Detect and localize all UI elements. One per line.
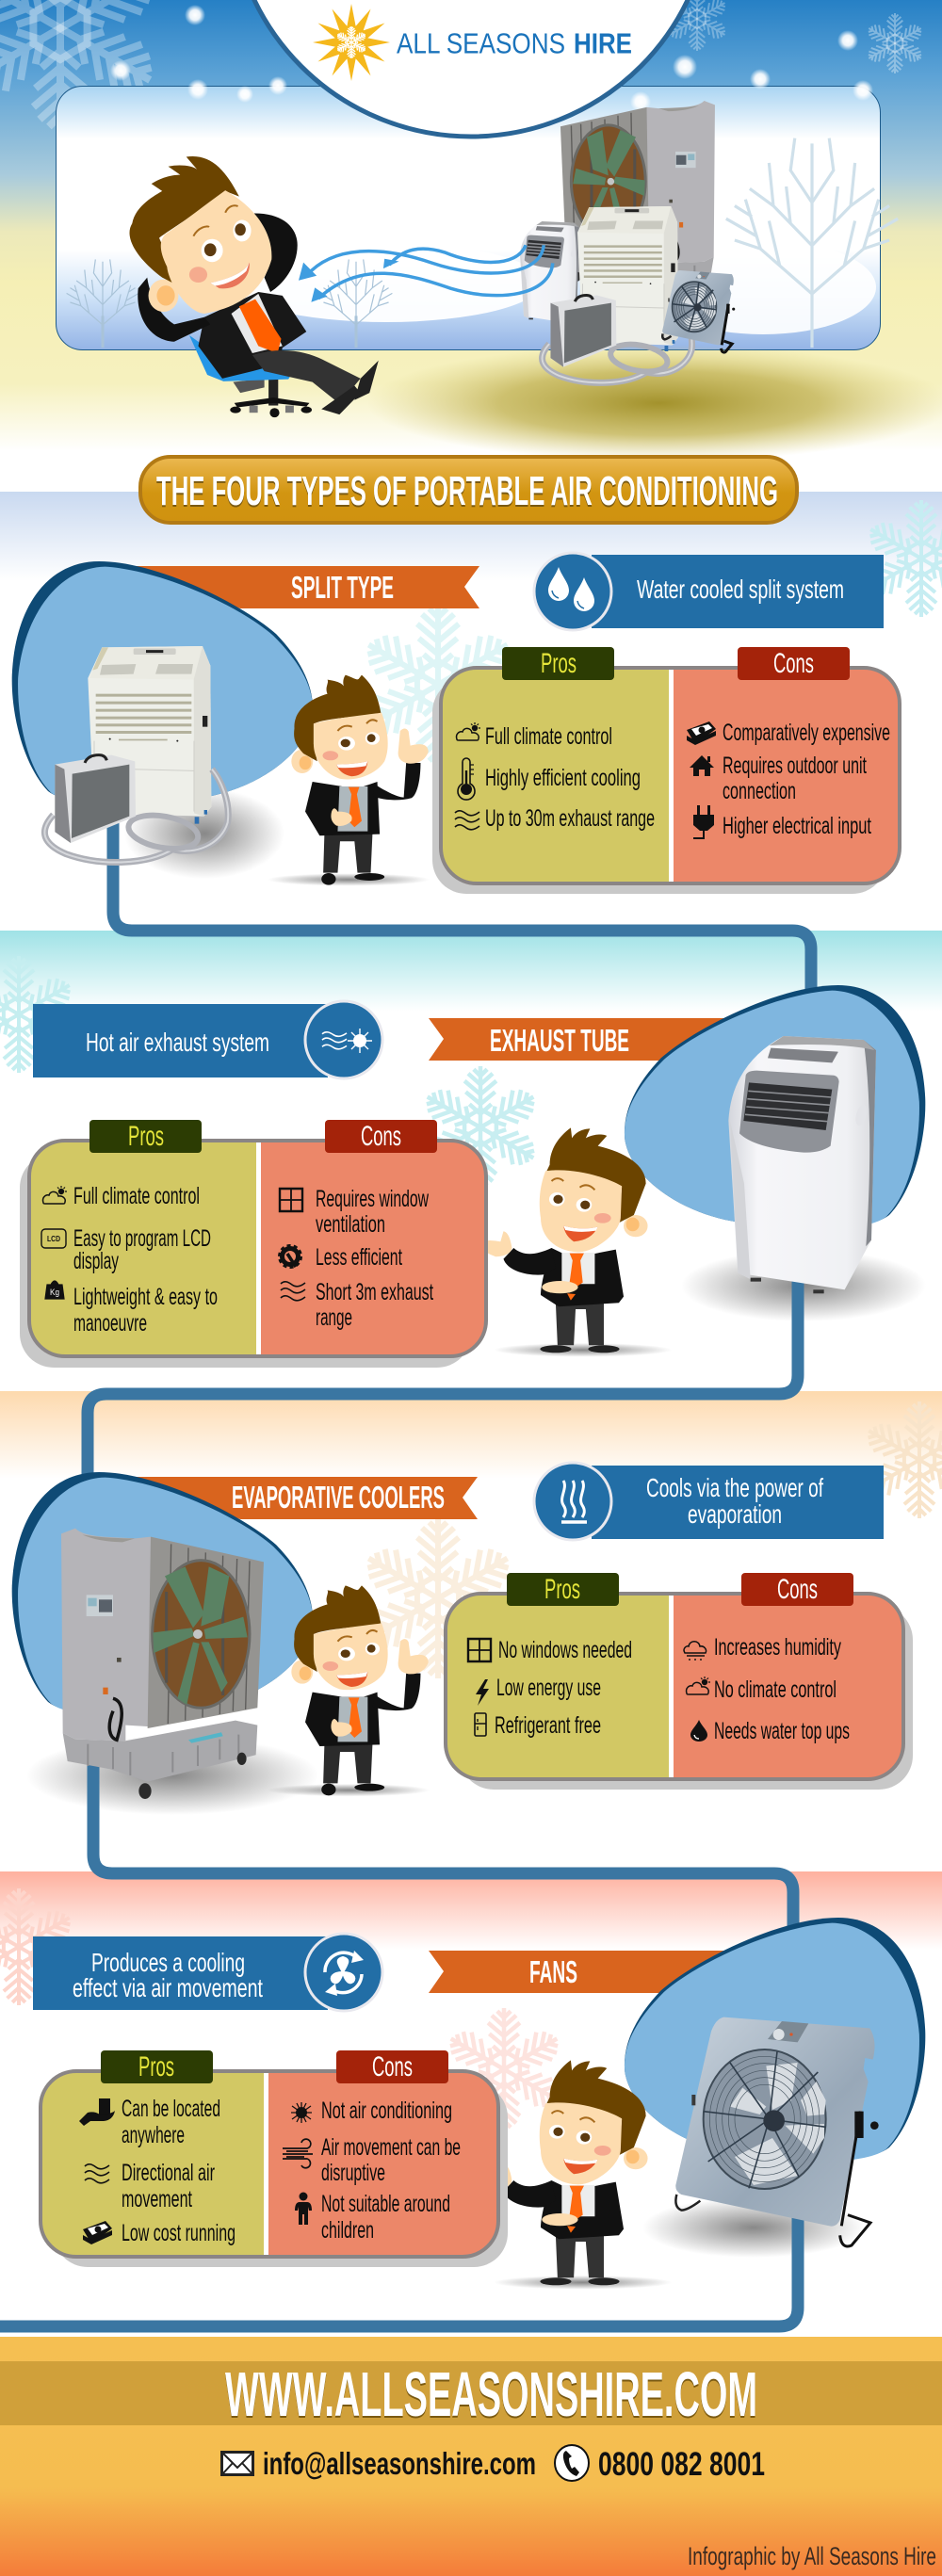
pros list: [79, 2096, 236, 2246]
pros tab: Pros: [138, 2051, 174, 2082]
section 3: evaporative coolers: [12, 1463, 913, 1799]
cons list: Not air conditioning: [321, 2098, 452, 2124]
banner: hot air exhaust system: [33, 1001, 382, 1078]
pros and cons panel: [41, 2050, 508, 2267]
industrial fan: [675, 2017, 879, 2246]
banner text line 2: evaporation: [688, 1499, 782, 1529]
pros tab: [101, 2050, 213, 2083]
cons list: [684, 1634, 850, 1744]
split unit with ducting: [44, 646, 228, 863]
pros and cons panel: [446, 1573, 913, 1790]
logo wordmark bold: HIRE: [574, 26, 632, 60]
snowflake: near logo: [665, 0, 729, 51]
pros list: Highly efficient cooling: [485, 765, 641, 791]
pros tab: [89, 1120, 202, 1153]
cons tab: [325, 1120, 437, 1153]
blob: fans: [625, 1918, 925, 2162]
heading: fans: FANS: [529, 1954, 577, 1989]
device floor shadows: [26, 788, 926, 2258]
banner text: Water cooled split system: [637, 575, 844, 604]
cons list: Less efficient: [316, 1244, 402, 1271]
pros and cons panel: [20, 1120, 486, 1368]
pros list: Up to 30m exhaust range: [485, 805, 655, 832]
section 4 background: [0, 1871, 942, 1950]
cons list: Needs water top ups: [714, 1718, 850, 1744]
logo: [313, 4, 565, 81]
cons list: [283, 2098, 461, 2244]
cons tab: Cons: [773, 648, 814, 679]
pros list: Low cost running: [122, 2220, 236, 2246]
pros and cons panel: [432, 647, 900, 894]
pros list: Refrigerant free: [495, 1712, 601, 1739]
logo wordmark: ALL SEASONS: [397, 26, 565, 60]
title banner: [140, 457, 797, 523]
cons list: Requires window: [316, 1186, 430, 1212]
icon: water drops: [548, 567, 594, 611]
telephone number: 0800 082 8001: [598, 2446, 765, 2483]
pros list: LCD: [47, 1235, 60, 1243]
gold floor shadow: [367, 345, 942, 462]
background snowflakes: [0, 500, 942, 2130]
businessman presenting: [475, 1127, 672, 1357]
pros list: manoeuvre: [73, 1310, 147, 1337]
cons list: children: [321, 2217, 374, 2244]
heading: evaporative coolers: EVAPORATIVE COOLERS: [232, 1480, 445, 1515]
icon: waves and sun: [322, 1029, 372, 1053]
pros list: No windows needed: [498, 1637, 632, 1663]
pros list: [468, 1637, 632, 1739]
cons list: range: [316, 1304, 352, 1331]
pros tab: [502, 647, 614, 680]
portable air conditioner: [728, 1036, 876, 1293]
winter trees: [67, 138, 898, 348]
banner: cools via evaporation: [534, 1463, 884, 1540]
arrows: cool air flow: [299, 245, 553, 302]
cons list: No climate control: [714, 1677, 836, 1703]
cons list: Air movement can be: [321, 2134, 461, 2161]
pros list: Full climate control: [73, 1183, 200, 1209]
blob: split type: [12, 561, 313, 805]
blob: evaporative coolers: [12, 1472, 313, 1716]
reclining businessman: [130, 156, 379, 417]
icon: envelope: [222, 2453, 252, 2475]
section 1 background: [0, 492, 942, 581]
section 4: fans: [33, 1918, 925, 2290]
cons tab: Cons: [361, 1121, 401, 1152]
ribbon: fans: [429, 1951, 807, 1993]
pros list: Can be located: [122, 2096, 220, 2122]
banner text line 2: effect via air movement: [73, 1973, 263, 2002]
cons list: Not suitable around: [321, 2191, 450, 2217]
section 1: split type: [12, 553, 900, 894]
snowflake: top right: [865, 13, 925, 73]
pros list: [455, 722, 655, 832]
cons tab: Cons: [372, 2051, 413, 2082]
cons list: [687, 720, 890, 839]
pros list: Kg: [50, 1288, 59, 1297]
section 2 background: [0, 931, 942, 1012]
icon: telephone: [555, 2445, 589, 2481]
pros list: movement: [122, 2186, 192, 2212]
cons list: [279, 1186, 433, 1331]
banner text: Hot air exhaust system: [86, 1028, 269, 1057]
pros list: Low energy use: [496, 1675, 601, 1701]
ribbon: evaporative coolers: [130, 1477, 478, 1519]
snowflake: top left: [0, 0, 164, 132]
pros list: Lightweight & easy to: [73, 1284, 218, 1310]
cons tab: [336, 2050, 448, 2083]
email: info@allseasonshire.com: [263, 2446, 536, 2481]
cons list: ventilation: [316, 1211, 385, 1238]
banner text line 1: Produces a cooling: [91, 1948, 245, 1977]
banner: cooling via air movement: [33, 1934, 382, 2011]
ribbon: exhaust tube: [429, 1018, 807, 1061]
ribbon: split type: [130, 566, 479, 608]
hero background ground: [0, 283, 942, 451]
icon: rising heat: [561, 1481, 587, 1522]
pros list: Full climate control: [485, 723, 612, 750]
cons tab: Cons: [777, 1574, 818, 1605]
cons tab: [741, 1573, 853, 1606]
pros list: display: [73, 1248, 119, 1274]
glow dots: [110, 5, 873, 112]
hero scene panel: [57, 87, 880, 350]
pros tab: [507, 1573, 619, 1606]
pros list: Directional air: [122, 2160, 215, 2186]
businessman pointing: [268, 1585, 430, 1796]
icon: circulating fan: [325, 1951, 364, 1996]
pros tab: Pros: [544, 1574, 580, 1605]
cons list: disruptive: [321, 2160, 385, 2186]
pros tab: Pros: [541, 648, 577, 679]
banner: water cooled split system: [534, 553, 884, 630]
cons list: Increases humidity: [714, 1634, 841, 1661]
section 2: exhaust tube: [20, 985, 925, 1368]
cons list: Requires outdoor unit: [723, 753, 867, 779]
pros list: [41, 1183, 218, 1337]
logo circle: [231, 0, 711, 137]
air conditioning units group: [520, 101, 735, 382]
businessman pointing: [268, 675, 430, 886]
icon: sun logo: [313, 4, 390, 81]
footer: [0, 2337, 942, 2576]
section 3 background: [0, 1391, 942, 1479]
pros list: Easy to program LCD: [73, 1225, 211, 1252]
hero snow hills: [231, 240, 876, 334]
heading: split type: SPLIT TYPE: [291, 570, 394, 605]
hero background sky: [0, 0, 942, 283]
evaporative cooler: [61, 1529, 264, 1799]
connector line: [0, 819, 811, 2326]
pros list: anywhere: [122, 2122, 185, 2148]
pros tab: Pros: [128, 1121, 164, 1152]
banner text line 1: Cools via the power of: [646, 1473, 823, 1502]
heading: exhaust tube: EXHAUST TUBE: [490, 1023, 629, 1058]
cons list: Short 3m exhaust: [316, 1279, 433, 1305]
blob: exhaust tube: [625, 985, 925, 1229]
businessman presenting: [475, 2060, 672, 2290]
cons list: connection: [723, 778, 796, 804]
cons tab: [738, 647, 850, 680]
